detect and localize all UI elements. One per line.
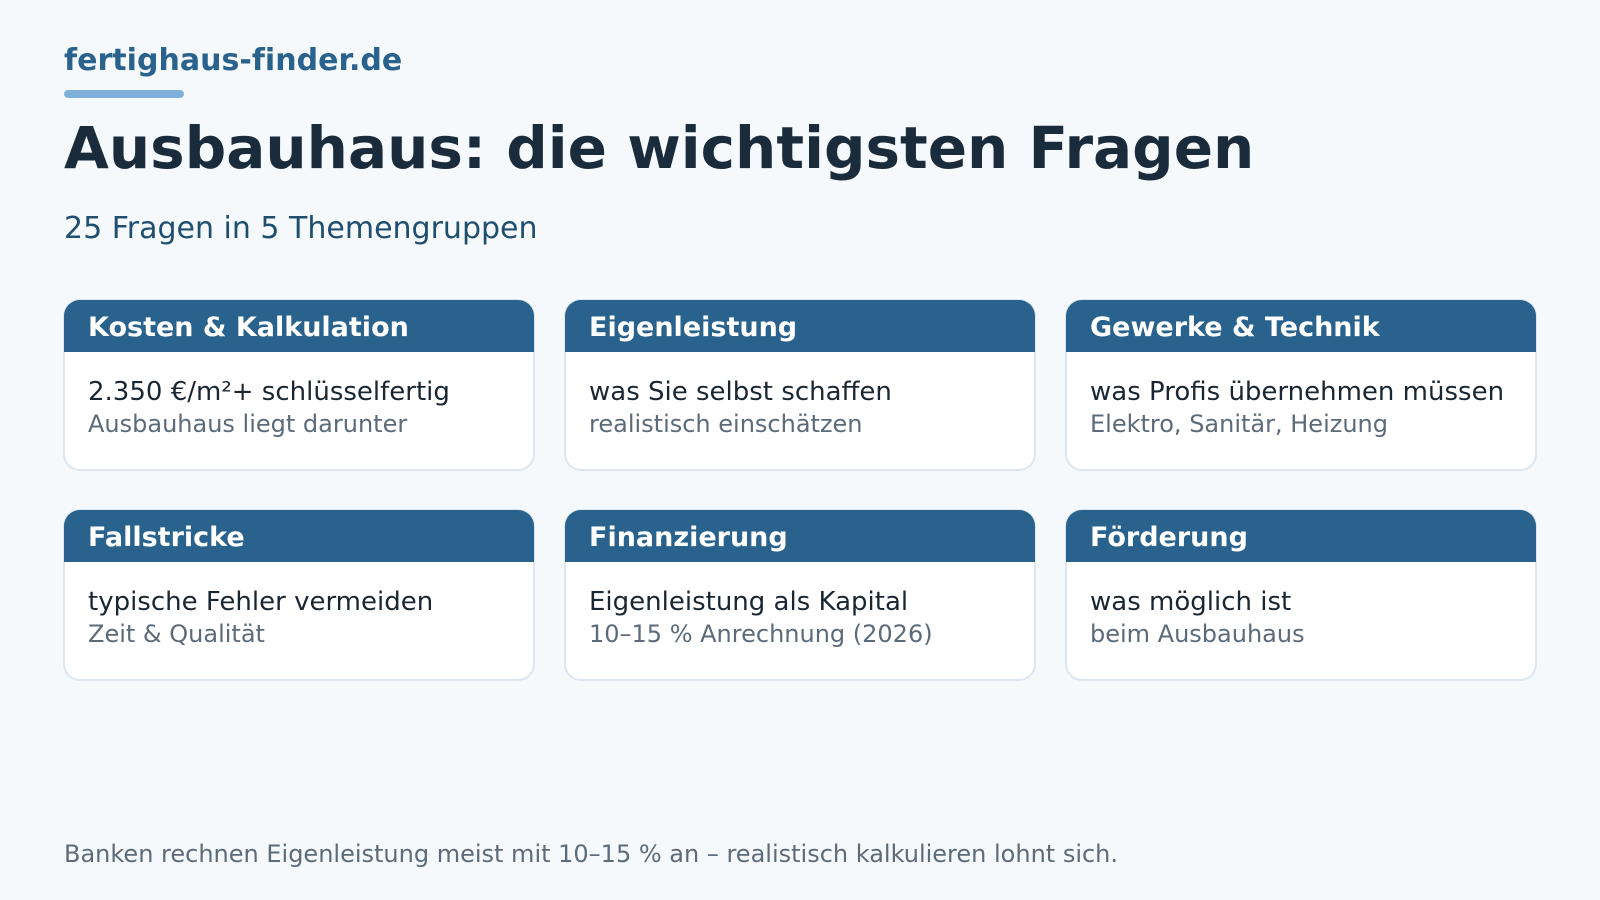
panel: Fallstricke: Fallstricke (88, 522, 245, 553)
panel: Förderung: Förderung (1090, 522, 1248, 553)
panel: Gewerke & Technik (1066, 300, 1536, 470)
panel: Gewerke & Technik: Gewerke & Technik (1090, 312, 1381, 343)
panel: Gewerke & Technik: Elektro, Sanitär, Heizung (1090, 410, 1388, 438)
panel: Kosten & Kalkulation: 2.350 €/m²+ schlüsselfertig (88, 377, 450, 407)
footer note: Banken rechnen Eigenleistung meist mit 10–15 % an – realistisch kalkulieren lohnt sich. (64, 840, 1118, 868)
panel: Kosten & Kalkulation: Kosten & Kalkulation (88, 312, 409, 343)
brand name: fertighaus-finder.de (64, 43, 402, 78)
panel: Kosten & Kalkulation: Ausbauhaus liegt darunter (88, 410, 407, 438)
panel: Eigenleistung (565, 300, 1035, 470)
panel: Fallstricke: typische Fehler vermeiden (88, 587, 433, 617)
panel: Fallstricke: Zeit & Qualität (88, 620, 265, 648)
panel: Förderung: was möglich ist (1090, 587, 1291, 617)
subtitle: 25 Fragen in 5 Themengruppen (64, 211, 538, 246)
panel: Eigenleistung: Eigenleistung (589, 312, 797, 343)
panel: Finanzierung (565, 510, 1035, 680)
panel: Förderung: beim Ausbauhaus (1090, 620, 1305, 648)
panel: Finanzierung: Eigenleistung als Kapital (589, 587, 908, 617)
panel: Gewerke & Technik: was Profis übernehmen müssen (1090, 377, 1504, 407)
title: Ausbauhaus: die wichtigsten Fragen (64, 114, 1254, 182)
panel: Fallstricke (64, 510, 534, 680)
panel: Kosten & Kalkulation (64, 300, 534, 470)
panel: Förderung (1066, 510, 1536, 680)
panel: Finanzierung: Finanzierung (589, 522, 788, 553)
panel: Eigenleistung: realistisch einschätzen (589, 410, 863, 438)
panel: Finanzierung: 10–15 % Anrechnung (2026) (589, 620, 933, 648)
accent bar (64, 90, 184, 98)
panel: Eigenleistung: was Sie selbst schaffen (589, 377, 892, 407)
